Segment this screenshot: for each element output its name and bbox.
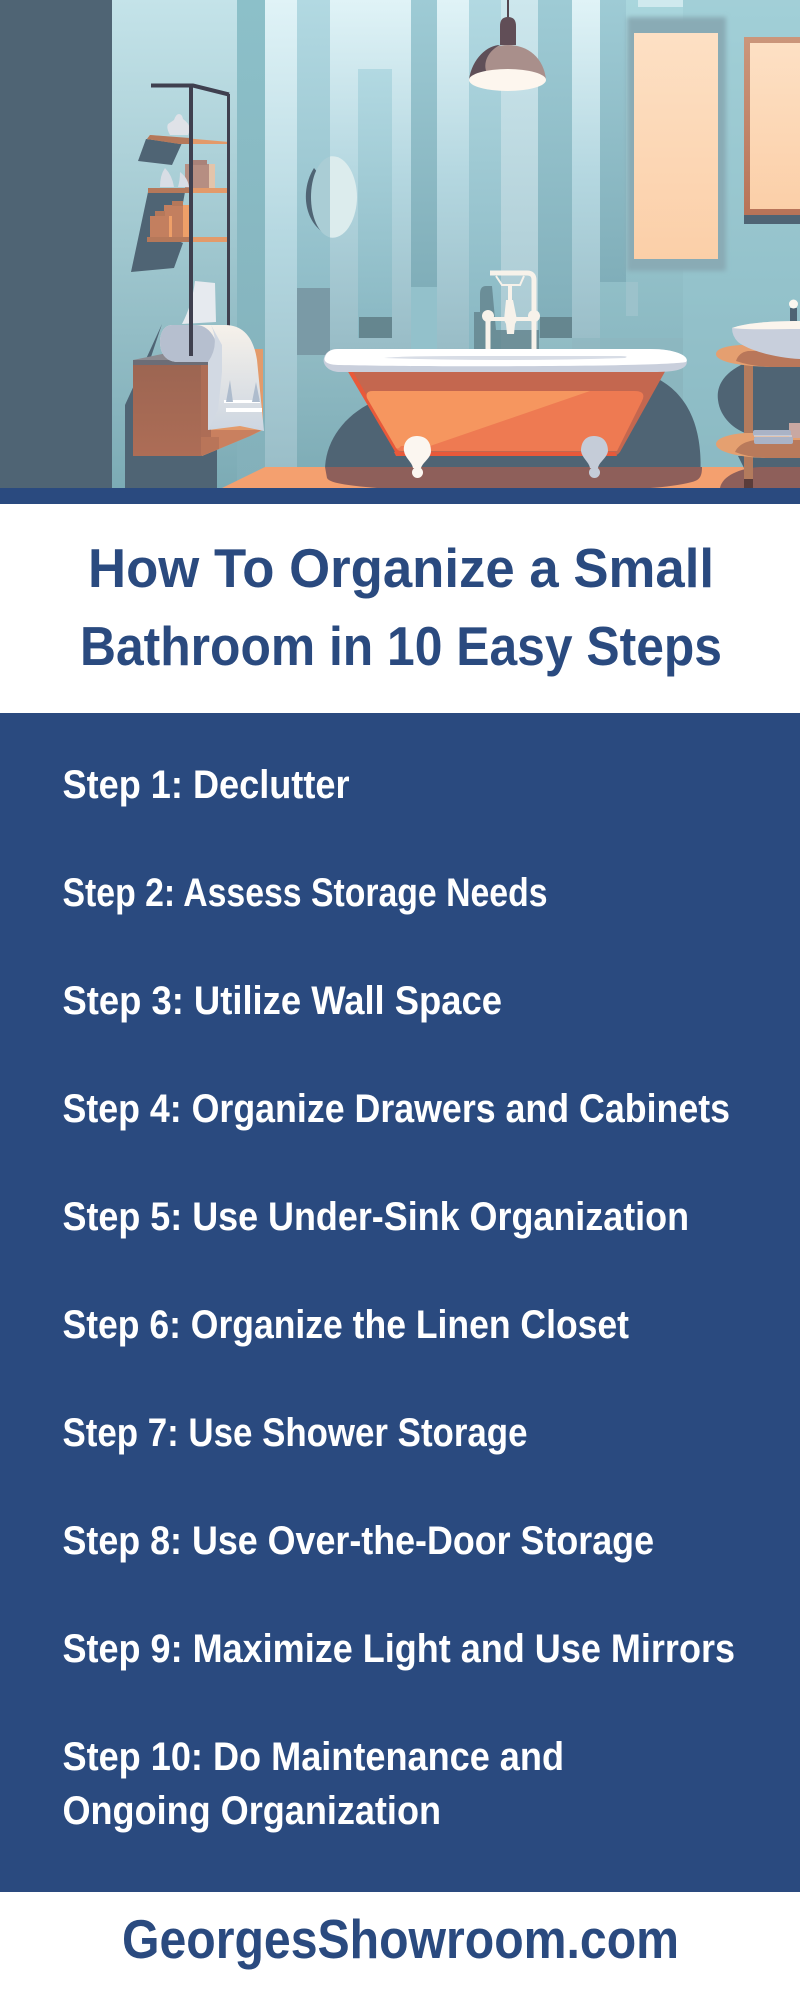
wall with vertical stripes bbox=[112, 0, 800, 488]
step 2: Step 2: Assess Storage Needs bbox=[62, 871, 548, 915]
folded cloth bbox=[182, 281, 216, 324]
storage shelf unit bbox=[131, 86, 229, 356]
step 7: Step 7: Use Shower Storage bbox=[62, 1411, 528, 1455]
wall mirror bbox=[306, 156, 357, 238]
step 1: Step 1: Declutter bbox=[62, 763, 350, 807]
hero illustration: bathroom bbox=[0, 0, 800, 504]
step 6: Step 6: Organize the Linen Closet bbox=[62, 1303, 629, 1347]
blue divider band bbox=[0, 488, 800, 504]
vase bbox=[167, 114, 190, 135]
step 10: Step 10: Do Maintenance and bbox=[62, 1735, 564, 1779]
step 8: Step 8: Use Over-the-Door Storage bbox=[62, 1519, 654, 1563]
footer website: GeorgesShowroom.com bbox=[122, 1908, 679, 1970]
step 3: Step 3: Utilize Wall Space bbox=[62, 979, 502, 1023]
panel: steps list bbox=[0, 713, 800, 1892]
cabinet bbox=[133, 349, 263, 456]
upper box bbox=[185, 160, 215, 188]
step 5: Step 5: Use Under-Sink Organization bbox=[62, 1195, 689, 1239]
window right bbox=[744, 37, 800, 224]
floor bbox=[222, 467, 800, 488]
tub foot left bbox=[404, 436, 431, 478]
shelf boards bbox=[147, 135, 229, 242]
shadow under tub bbox=[325, 380, 701, 480]
step 10: Ongoing Organization bbox=[62, 1789, 441, 1833]
dark left panel bbox=[0, 0, 112, 488]
pendant lamp bbox=[469, 0, 546, 91]
tub foot right bbox=[581, 436, 608, 478]
white ornaments bbox=[160, 168, 189, 187]
step 10 bbox=[62, 1735, 564, 1833]
cabinet shadow bbox=[125, 324, 217, 488]
small orange boxes bbox=[150, 201, 189, 237]
towel bbox=[160, 325, 264, 431]
shelf shadows bbox=[131, 139, 185, 272]
sink stand bbox=[716, 345, 800, 488]
frame bbox=[151, 86, 229, 356]
sink basin bbox=[732, 300, 800, 359]
step 9: Step 9: Maximize Light and Use Mirrors bbox=[62, 1627, 735, 1671]
step 4: Step 4: Organize Drawers and Cabinets bbox=[62, 1087, 730, 1131]
floor shadow bbox=[325, 467, 702, 488]
title: How To Organize a Small bbox=[88, 537, 714, 599]
bath faucet bbox=[474, 273, 540, 350]
title: Bathroom in 10 Easy Steps bbox=[80, 615, 722, 677]
bathtub bbox=[324, 349, 687, 456]
window left bbox=[627, 17, 726, 271]
title bbox=[80, 537, 722, 677]
